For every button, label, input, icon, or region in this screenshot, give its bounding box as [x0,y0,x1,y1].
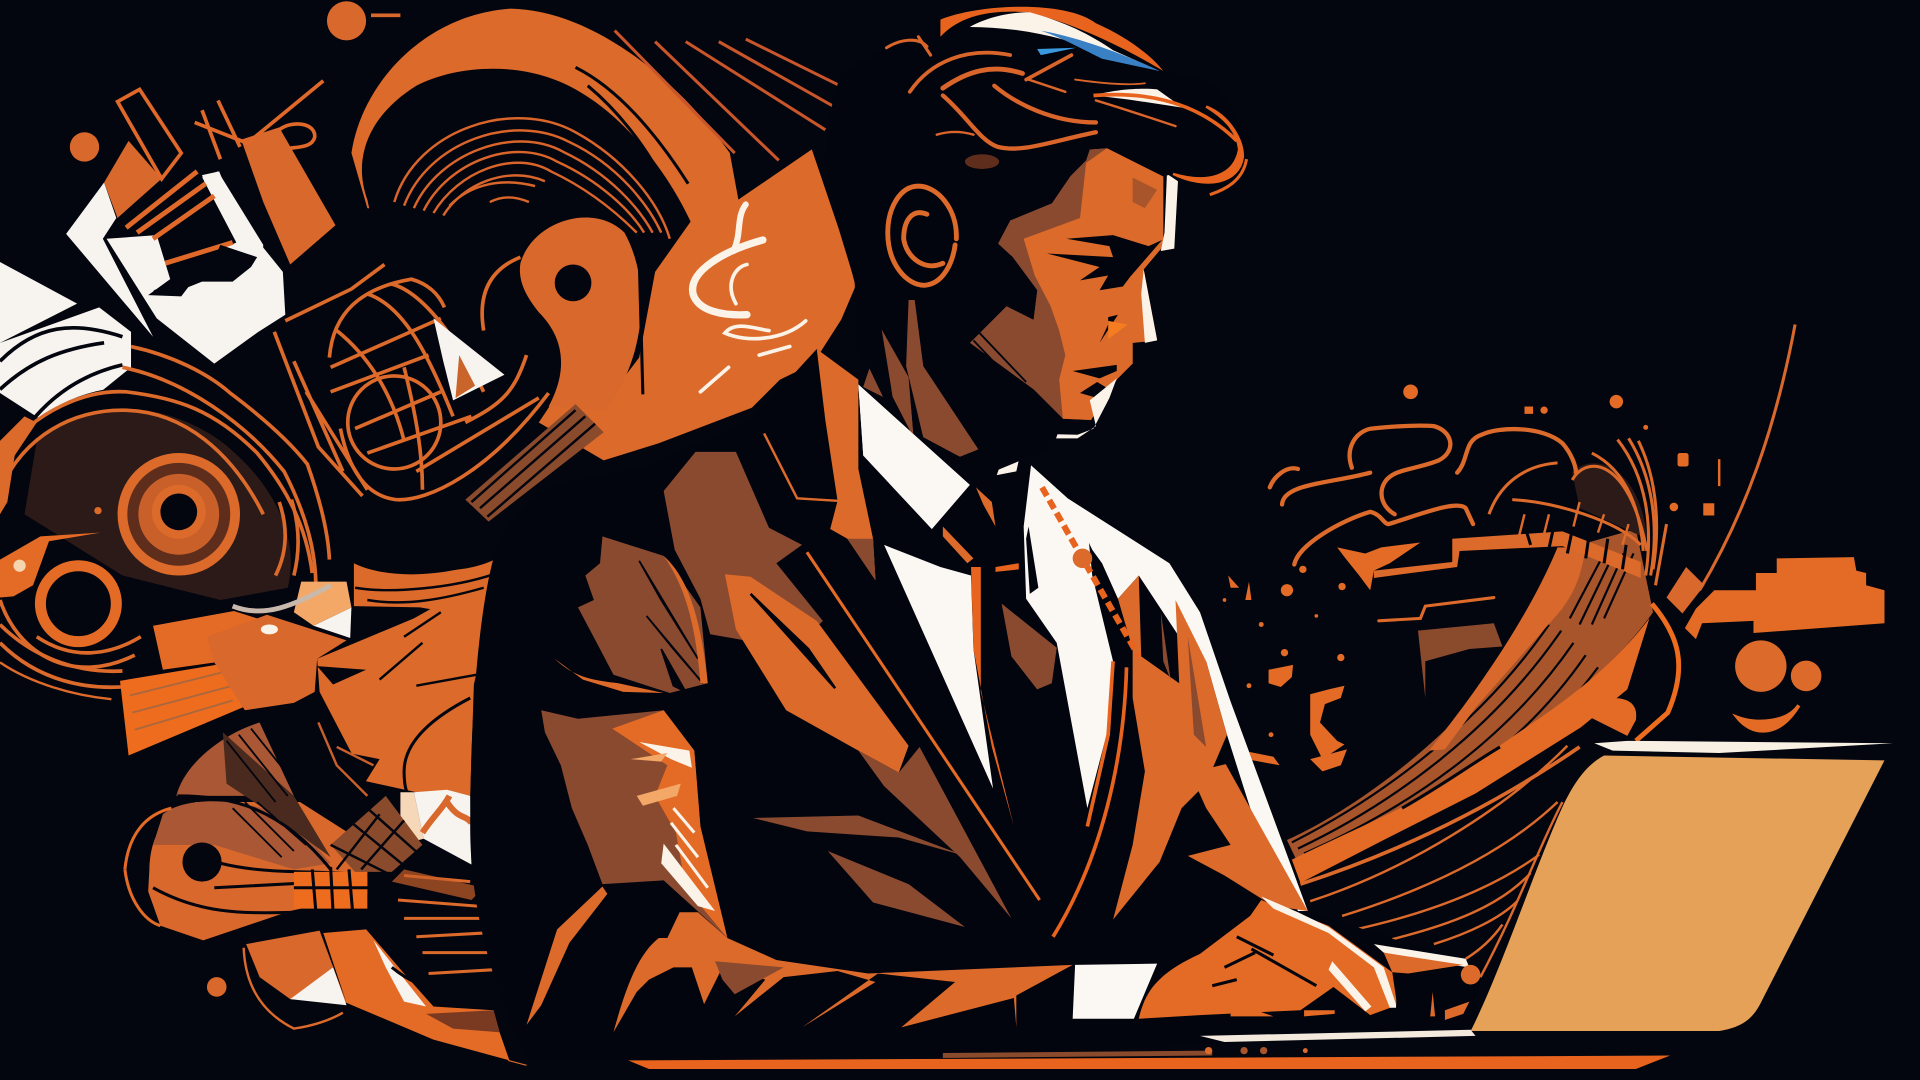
shape: lower-left oval with pupil [125,722,509,1060]
sleeve: orange lower arm [1188,764,1308,911]
shape: brown panel [1418,623,1502,698]
abstract art: right cluster [1223,324,1884,977]
swirl: big orange arc and wedge [274,9,856,522]
jacket: brown fold 2 [828,851,965,927]
line: thin shoulder seam [764,433,838,501]
squiggle: cloud lines [1270,426,1576,621]
fan: top of the sweep [1374,438,1667,585]
ear: repeat over hair [888,186,956,285]
jacket: brown fold 1 [753,816,965,856]
splatter: particle dots [1223,384,1720,771]
desk: orange desk line [628,1047,1670,1069]
jacket: brown shoulder patch [664,452,823,661]
paper: top-left folded shapes [66,81,336,364]
shapes: large orange mass beside the shoulder [267,525,500,864]
disc: dark vinyl disc with rings [0,347,329,710]
waves: main hatched sweep [1287,529,1679,883]
line: shirt placket [1053,661,1127,937]
laptop base: deck edge [1200,1030,1476,1042]
sleeve: orange upper arm [1113,576,1227,920]
tie: knot detail [943,487,1038,594]
neck brown streaks repeat over hair [863,300,978,457]
abstract art: left cluster [0,1,856,1060]
shape: orange blob under squiggle [1337,542,1420,590]
waves: thin lines under sweep [1300,746,1580,977]
jacket: orange lapel band [725,574,909,773]
dots: small circles [70,1,400,997]
shape: stacked block [1685,557,1884,639]
sleeve: shirt shoulder white [1068,498,1308,911]
hair: strands and highlights [887,7,1247,195]
tie strip: beaded orange line [1042,487,1139,656]
jacket: lower brown wedge [858,747,1011,918]
neck: brown streaks [863,300,978,457]
shirt: white front left [884,545,993,789]
hatched fan [465,404,604,522]
jacket: upper arm patch [555,536,708,693]
shape: bottom orange pieces [244,929,509,1060]
shirt: white collar [858,384,970,529]
jacket: dark suit silhouette [470,349,1480,1058]
cuff: white shirt cuff [1073,964,1157,1019]
fish: orange shape with ring [0,533,141,667]
jacket: orange neck stripe [817,349,876,580]
icon: smiley dots [1735,640,1821,731]
collar: redraw over neck [858,384,970,529]
line: lapel orange edge [807,552,1040,900]
ear: outlined ear [888,186,956,285]
laptop: open laptop screen back [1200,741,1893,1042]
hand: typing hand [1139,896,1480,1026]
panel: white striped wedge at far left [0,262,131,429]
shirt: white front right [1024,465,1113,808]
paper: lower-left orange sheets [120,582,351,756]
figure: businessman [470,4,1480,1065]
tie stripe: orange [971,567,1014,827]
jacket: lapel slit [751,594,835,688]
tie: brown shadow [1002,604,1057,689]
line: long curve [1700,324,1795,590]
head: face [967,148,1178,475]
sleeve: forearm with orange edges [508,887,1073,1065]
hair: swept hair silhouette [825,4,1250,478]
shape: small diagonal block [1667,567,1704,613]
calligraphy: white flourish [693,204,806,392]
jacket: lower arm patch [541,710,727,938]
